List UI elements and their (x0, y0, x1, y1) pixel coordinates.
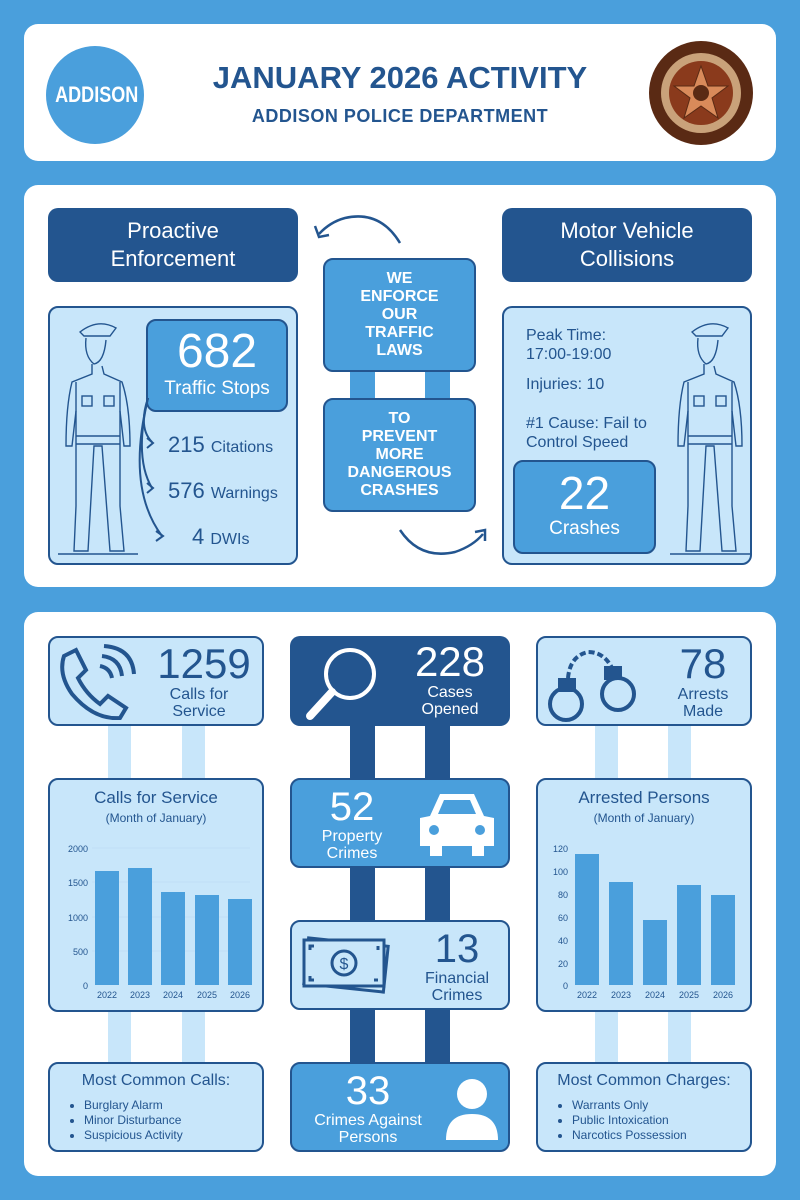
text: collision stats (526, 327, 611, 363)
chart: arrested persons: 100 (553, 867, 568, 877)
text: most common calls: Burglary Alarm (84, 1098, 163, 1112)
chart: arrested persons: 2024 (645, 990, 665, 1000)
chart: arrested persons: 120 (553, 844, 568, 854)
chart: calls for service: 2000 (68, 844, 88, 854)
stat: crimes against persons: Persons (339, 1129, 397, 1146)
icon: person (446, 1079, 498, 1140)
heading: Motor Vehicle Collisions: Collisions (580, 246, 674, 271)
chart: arrested persons: 80 (558, 890, 568, 900)
chart: calls for service: 0 (83, 981, 88, 991)
chart: calls for service: 1000 (68, 913, 88, 923)
heading: Motor Vehicle Collisions (502, 208, 752, 282)
connector bars (108, 724, 131, 780)
chart: calls for service: 2026 (230, 990, 250, 1000)
chart: arrested persons: 20 (558, 959, 568, 969)
box: we enforce (323, 258, 476, 372)
stat: financial crimes: Financial (425, 970, 489, 987)
stat: arrests made: Arrests (678, 686, 728, 703)
panel: proactive enforcement (48, 306, 298, 565)
chart: calls for service: 2022 (97, 990, 117, 1000)
box: to prevent (323, 398, 476, 512)
chart: arrested persons: Arrested Persons (578, 788, 710, 807)
box: we enforce: ENFORCE (360, 288, 439, 305)
subtitle: ADDISON POLICE DEPARTMENT (252, 106, 548, 126)
box: we enforce: WE (387, 270, 412, 287)
stat: financial crimes: 13 (435, 927, 479, 971)
stat: 682 traffic stops (146, 319, 288, 412)
box: to prevent: PREVENT (362, 428, 437, 445)
arrow: top curved (314, 215, 401, 244)
chart: arrested persons: 60 (558, 913, 568, 923)
stat: crimes against persons: Crimes Against (314, 1112, 422, 1129)
text: collision stats: Peak Time: (526, 327, 606, 344)
text: most common calls: Most Common Calls: (82, 1072, 230, 1089)
panel: motor vehicle collisions: Control Speed (526, 434, 628, 451)
heading: Proactive Enforcement: Proactive (127, 218, 219, 243)
stat: property crimes (290, 778, 510, 868)
box: we enforce: LAWS (376, 342, 423, 359)
text: most common charges: Warrants Only (572, 1098, 648, 1112)
text: collision stats: 17:00-19:00 (526, 346, 611, 363)
chart: calls for service: 2023 (130, 990, 150, 1000)
stat: calls for service: Calls for (170, 686, 228, 703)
text: most common charges (536, 1062, 752, 1152)
icon: money: $ (340, 956, 349, 973)
logo: Addison: ADDISON (55, 82, 138, 107)
header card (24, 24, 776, 161)
chart: calls for service: 500 (73, 947, 88, 957)
chart: arrested persons (536, 778, 752, 1012)
stat: arrests made: Made (683, 703, 723, 720)
stat: cases opened: 228 (415, 638, 485, 685)
arrow: bottom curved (399, 528, 486, 555)
chart: calls for service: 2025 (197, 990, 217, 1000)
arrows: breakdown (138, 398, 165, 542)
stat: financial crimes (290, 920, 510, 1010)
icon: phone (60, 644, 136, 720)
text: most common calls: Minor Disturbance (84, 1113, 181, 1127)
stat: 4 DWIs: 4 DWIs (192, 524, 249, 549)
middle card (24, 185, 776, 587)
icon: officer (58, 323, 138, 555)
icon: handcuffs (548, 650, 636, 722)
stat: calls for service: Service (172, 703, 226, 720)
box: we enforce: OUR (382, 306, 417, 323)
chart: arrested persons: 0 (563, 981, 568, 991)
stat: calls for service (48, 636, 264, 726)
title: JANUARY 2026 ACTIVITY (213, 60, 587, 95)
stat: crimes against persons: 33 (346, 1069, 390, 1113)
panel: motor vehicle collisions (502, 306, 752, 565)
stat: financial crimes: Crimes (432, 987, 482, 1004)
box: we enforce: TRAFFIC (365, 324, 434, 341)
text: most common charges: Public Intoxication (572, 1113, 669, 1127)
icon: money (302, 936, 390, 994)
stat: crimes against persons (290, 1062, 510, 1152)
stat: cases opened: Opened (422, 701, 478, 718)
police badge (649, 41, 753, 145)
stat: property crimes: Property (322, 828, 382, 845)
connector bars (350, 370, 375, 400)
stat: property crimes: Crimes (327, 845, 377, 862)
chart: arrested persons: 2025 (679, 990, 699, 1000)
text: most common charges: Most Common Charges: (557, 1072, 731, 1089)
box: to prevent: TO (389, 410, 410, 427)
text: most common calls: Suspicious Activity (84, 1128, 183, 1142)
stat: calls for service: 1259 (157, 640, 251, 687)
stat: 22 crashes: 22 (559, 467, 610, 519)
stat: 682 traffic stops: Traffic Stops (164, 378, 270, 399)
icon: car (420, 794, 494, 856)
heading: Proactive Enforcement: Enforcement (111, 246, 235, 271)
stat: 215 citations: 215 Citations (168, 432, 273, 457)
bottom card (24, 612, 776, 1176)
box: to prevent: CRASHES (360, 482, 439, 499)
stat: 682 traffic stops: 682 (177, 325, 257, 378)
chart: calls for service: 2024 (163, 990, 183, 1000)
stat: 22 crashes: Crashes (549, 518, 620, 539)
panel: motor vehicle collisions: #1 Cause: Fail to (526, 415, 647, 432)
chart: arrested persons: (Month of January) (594, 811, 694, 825)
stat: arrests made (536, 636, 752, 726)
chart: calls for service: (Month of January) (106, 811, 206, 825)
chart: arrested persons: 2026 (713, 990, 733, 1000)
box: to prevent: MORE (376, 446, 424, 463)
text: most common calls (48, 1062, 264, 1152)
stat: 22 crashes (513, 460, 656, 554)
heading: Proactive Enforcement (48, 208, 298, 282)
box: to prevent: DANGEROUS (347, 464, 452, 481)
heading: Motor Vehicle Collisions: Motor Vehicle (560, 218, 694, 243)
chart: calls for service: Calls for Service (94, 788, 218, 807)
stat: arrests made: 78 (680, 640, 726, 687)
chart: arrested persons: 40 (558, 936, 568, 946)
stat: cases opened (290, 636, 510, 726)
stat: cases opened: Cases (427, 684, 473, 701)
chart: calls for service: 1500 (68, 878, 88, 888)
chart: arrested persons: 2023 (611, 990, 631, 1000)
text: most common charges: Narcotics Possession (572, 1128, 687, 1142)
chart: arrested persons: 2022 (577, 990, 597, 1000)
chart: calls for service (48, 778, 264, 1012)
icon: magnifier (306, 648, 376, 720)
stat: 576 warnings: 576 Warnings (168, 478, 278, 503)
icon: officer (670, 323, 750, 555)
panel: motor vehicle collisions: Injuries: 10 (526, 376, 604, 393)
logo: Addison (46, 46, 144, 144)
stat: property crimes: 52 (330, 785, 374, 829)
